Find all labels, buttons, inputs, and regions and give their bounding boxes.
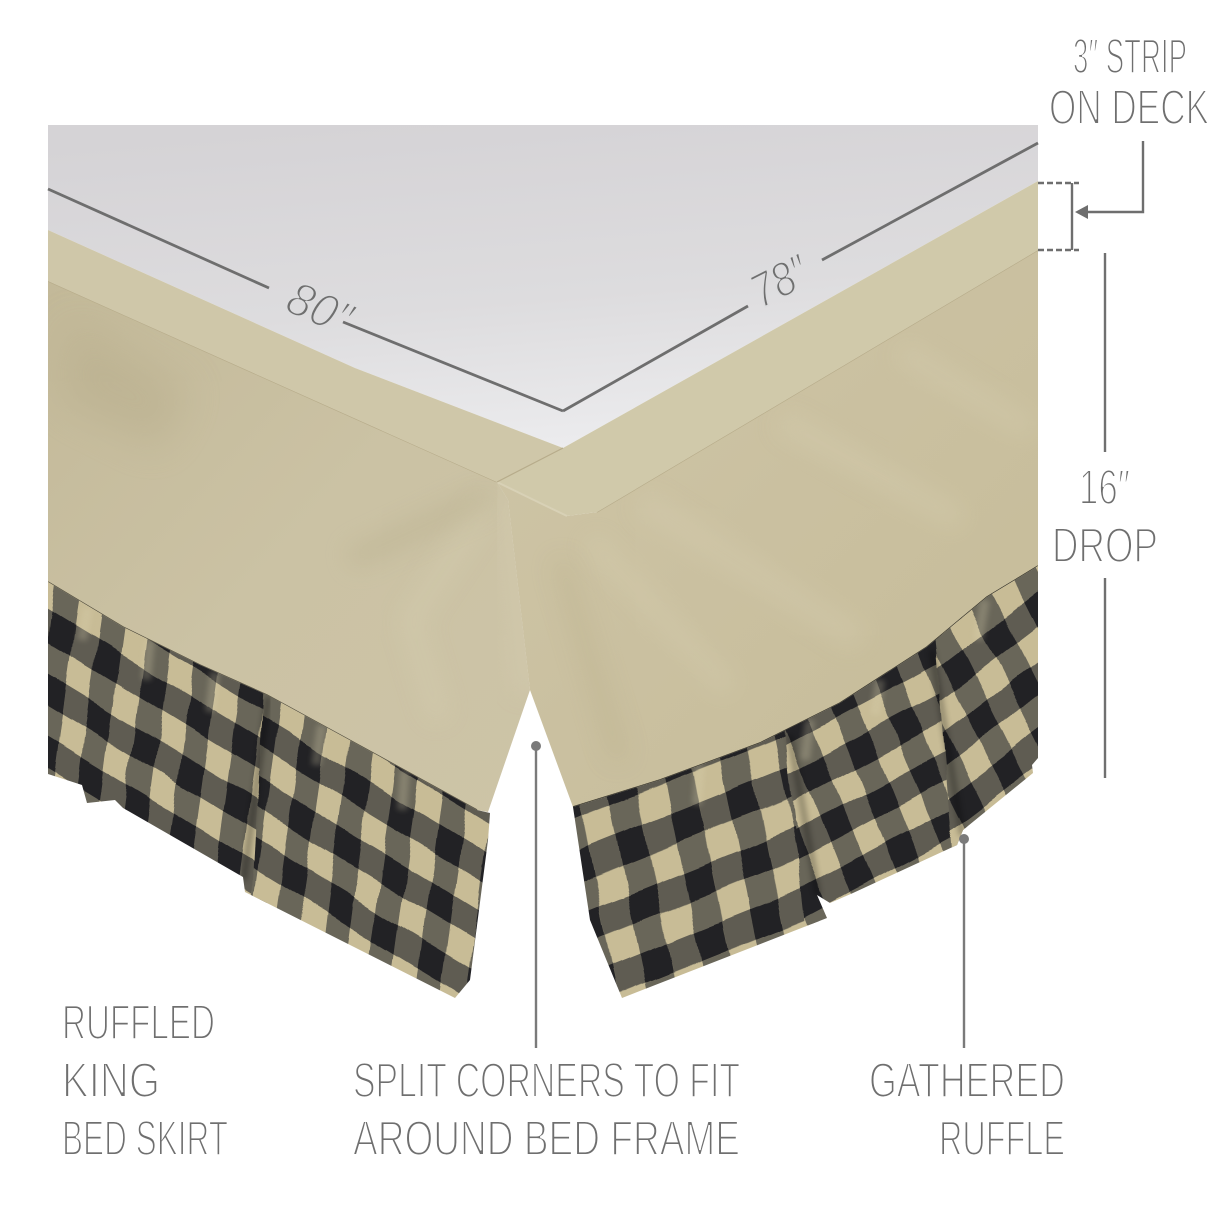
strip arrow [1075,141,1143,219]
product title: KING [62,1054,160,1108]
split corner label: SPLIT CORNERS TO FIT [353,1054,740,1108]
78 inch label: 78″ [742,244,819,319]
split corner leader [531,741,541,1048]
gathered ruffle callout [869,834,1065,1166]
product title: RUFFLED [62,996,215,1050]
left skirt panel [48,281,538,821]
right gingham ruffle [573,566,1038,998]
ruffle label: GATHERED [869,1054,1065,1108]
bed deck panel [48,125,1038,448]
80 inch dimension line [48,189,563,411]
left gingham ruffle [48,582,490,998]
ruffle label [869,1054,1065,1166]
product title [62,996,228,1166]
strip bracket [1038,183,1079,250]
right skirt panel [497,250,1042,810]
split corner label: AROUND BED FRAME [353,1112,740,1166]
drop label line 1: 16″ [1079,461,1130,515]
left deck strip [48,230,563,482]
drop lower line [1104,578,1106,778]
strip bracket bar [1071,183,1073,250]
drop label line 2: DROP [1052,519,1158,573]
drop callout [1052,253,1158,778]
80 inch label: 80″ [279,272,362,348]
ruffle label: RUFFLE [939,1112,1065,1166]
strip callout [1038,30,1209,250]
right deck strip [497,181,1038,516]
split corner label [353,1054,740,1166]
78 inch dimension line [563,143,1038,411]
corner flap folds [497,448,567,700]
ruffle leader [959,834,969,1048]
product title: BED SKIRT [62,1112,228,1166]
drop upper line [1104,253,1106,452]
split corners callout [353,741,740,1166]
